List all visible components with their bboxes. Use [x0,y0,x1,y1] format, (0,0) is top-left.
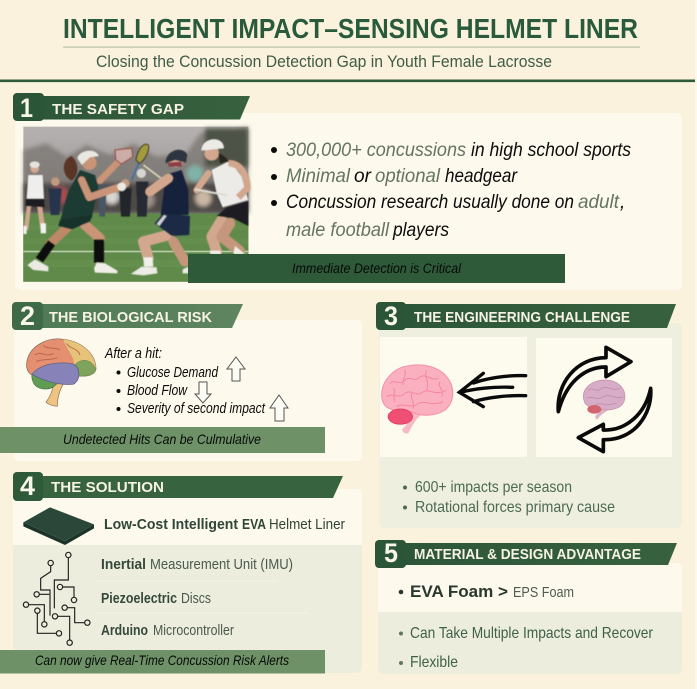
bullet list: safety gap facts: , [620,192,625,213]
text: liner name: EVA [242,517,266,533]
stick and head [115,148,133,164]
heading ribbon: the safety gap: 1 [20,93,33,123]
list: components: Arduino [101,623,148,639]
icon: EVA foam pad [23,507,94,545]
panel: the safety gap [13,93,682,290]
bullet list: safety gap facts: optional [375,166,441,187]
heading ribbon: material and design [375,538,677,568]
panel: the biological risk [0,301,362,461]
callout: undetected hits [0,427,325,453]
bullet list: safety gap facts: or [354,166,372,187]
bullet list: safety gap facts: in high school sports [471,140,631,161]
left background player [39,203,43,228]
heading ribbon: the solution: 4 [20,471,35,501]
heading ribbon: biological risk [12,301,243,331]
heading ribbon: the solution [13,471,343,501]
heading ribbon: the safety gap: THE SAFETY GAP [52,101,184,118]
player 2 [143,235,168,258]
list: components [96,557,307,639]
bullet list: safety gap facts: male football [286,220,390,241]
callout: immediate detection [188,254,565,283]
crowd [48,188,62,215]
list: components: Microcontroller [153,623,234,639]
bullet list: safety gap facts: Minimal [286,166,351,187]
icon: lilac brain [583,380,625,419]
text: after a hit: Glucose Demand [127,365,219,381]
heading ribbon: biological risk: 2 [20,301,35,331]
text: liner name [104,517,345,533]
photo: lacrosse players [23,127,248,282]
bullet list: safety gap facts: 300,000+ concussions [286,140,466,161]
player 1 [64,156,77,181]
icon: circuit traces [23,552,90,645]
icon: up arrow glucose [227,357,245,381]
text: liner name: Helmet Liner [269,517,345,533]
panel: the engineering challenge [376,301,682,528]
bullet list: engineering facts: 600+ impacts per season [415,479,572,496]
list: components: Inertial [101,557,146,573]
heading ribbon: the solution: THE SOLUTION [51,479,164,496]
bullet list: safety gap facts: adult [578,192,620,213]
image: rotational force on brain [536,338,672,457]
bullet list: advantages: Flexible [410,654,458,671]
callout: immediate detection: Immediate Detection is Critical [292,261,462,276]
panel: the solution [0,471,362,674]
image: direct impact on brain [380,337,527,457]
icon: up arrow severity [270,395,288,421]
callout: real-time alerts: Can now give Real-Time Concussion Risk Alerts [35,652,289,668]
icon: down arrow blood flow [195,382,211,403]
bullet list: engineering facts: Rotational forces primary cause [415,499,615,516]
bullet list: advantages: Can Take Multiple Impacts and Recover [410,625,654,642]
list: components: Measurement Unit (IMU) [150,557,293,573]
text: EVA foam vs EPS foam: EVA Foam > [410,582,508,601]
icon: coloured brain [27,339,96,406]
heading ribbon: engineering challenge: 3 [384,301,398,331]
text: after a hit [104,346,266,417]
heading ribbon: engineering challenge: THE ENGINEERING CHALLENGE [414,309,630,326]
bullet list: advantages [399,625,654,671]
list: components: Piezoelectric [101,591,177,607]
bullet list: safety gap facts: players [392,220,449,241]
text: after a hit: Severity of second impact [127,401,266,417]
heading ribbon: material and design: MATERIAL & DESIGN ADVANTAGE [414,546,641,563]
callout: undetected hits: Undetected Hits Can be Culmulative [63,431,261,447]
text: EVA foam vs EPS foam: EPS Foam [513,585,574,601]
heading ribbon: the safety gap [13,93,250,123]
list: components: Discs [181,591,211,607]
heading ribbon: engineering challenge [376,301,676,331]
icon: pink brain [382,365,453,434]
subtitle: Closing the Concussion Detection Gap in Youth Female Lacrosse [96,53,552,71]
heading ribbon: biological risk: THE BIOLOGICAL RISK [49,309,212,326]
text: liner name: Low-Cost Intelligent [104,517,238,533]
text: after a hit: After a hit: [104,346,162,362]
panel: material and design advantage [375,538,682,674]
player 3 [212,220,222,252]
text: after a hit: Blood Flow [127,383,188,399]
icon: rotation arrows [558,347,651,452]
icon: straight impact arrows [459,373,526,407]
bullet list: safety gap facts [271,140,631,241]
text: EVA foam vs EPS foam [399,582,574,601]
heading ribbon: material and design: 5 [384,538,398,568]
bullet list: engineering facts [403,479,615,516]
callout: real-time alerts [0,650,325,674]
title: INTELLIGENT IMPACT–SENSING HELMET LINER [63,13,638,44]
bullet list: safety gap facts: Concussion research usually done on [286,192,574,213]
bullet list: safety gap facts: headgear [445,166,518,187]
